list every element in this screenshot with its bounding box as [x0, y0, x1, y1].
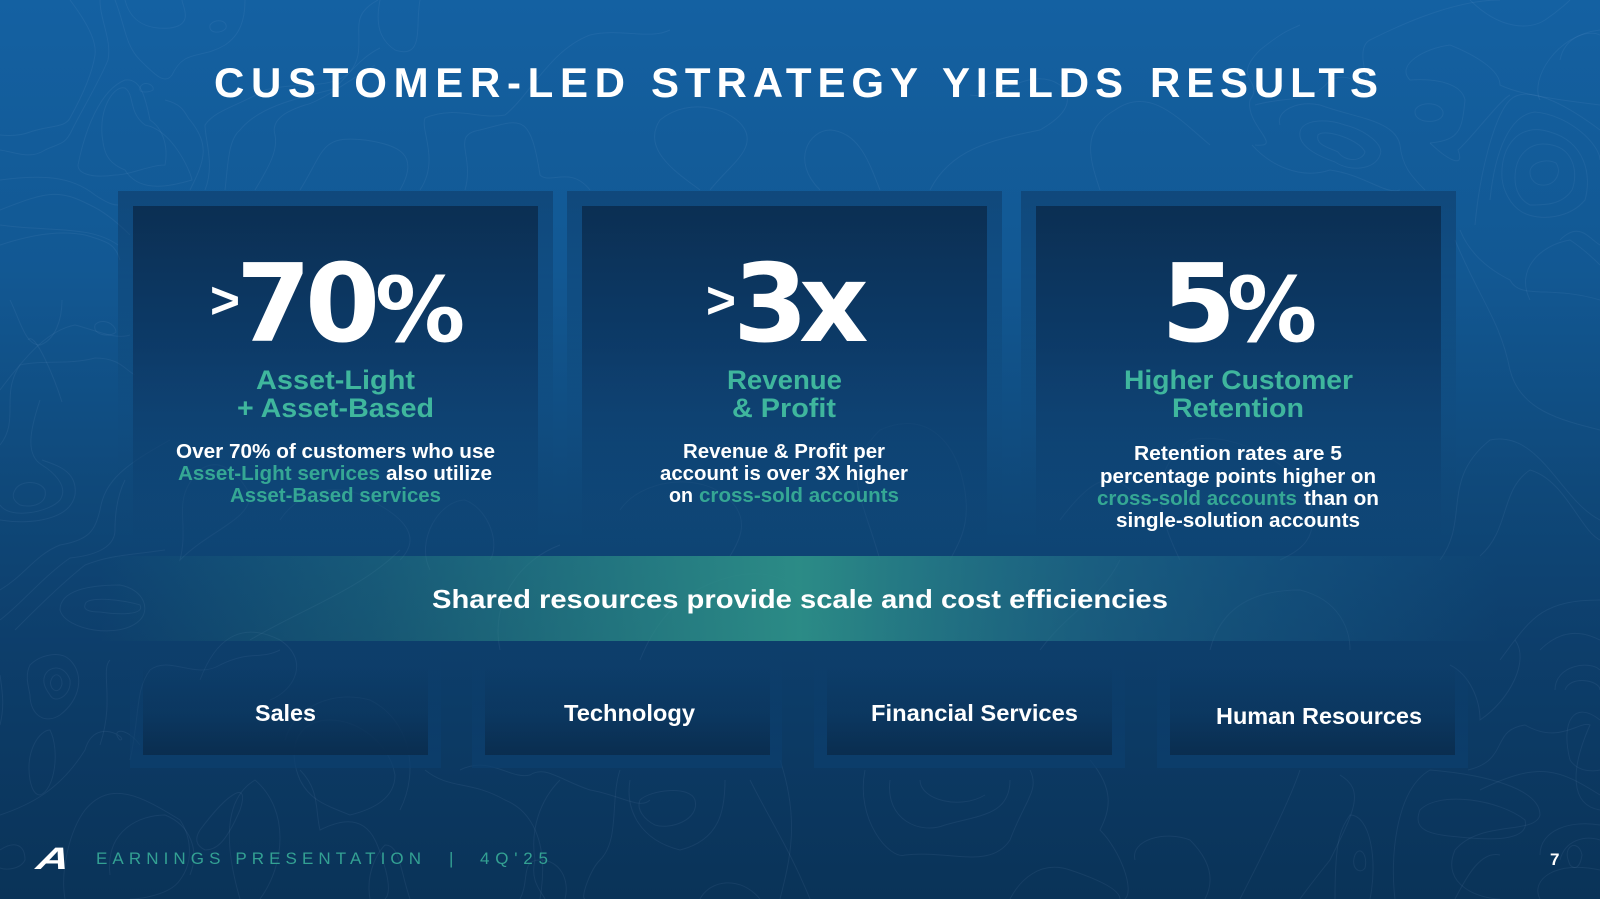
description: Asset-Light services — [178, 463, 380, 485]
box: financial services — [814, 641, 1125, 768]
description: Revenue & Profit per — [683, 441, 885, 463]
heading: Higher Customer — [1124, 365, 1353, 395]
heading: Asset-Light — [256, 365, 415, 395]
panel frame — [1021, 191, 1456, 556]
heading: Revenue — [727, 365, 842, 395]
box: technology: Technology — [564, 700, 695, 726]
banner: shared resources — [100, 556, 1500, 641]
title — [214, 59, 1378, 106]
heading — [1124, 365, 1353, 423]
heading — [727, 365, 842, 423]
banner: shared resources: Shared resources provide scale and cost efficiencies — [432, 584, 1168, 614]
description: cross-sold accounts — [699, 485, 899, 507]
box: financial services: Financial Services — [871, 700, 1078, 726]
description — [660, 441, 908, 507]
big number: 5 percent: % — [1227, 258, 1317, 363]
logo: A — [32, 841, 73, 876]
big number: greater than 70 percent: 70 — [236, 242, 380, 367]
big number: greater than 3x: > — [706, 272, 736, 330]
footer label: | — [449, 849, 453, 868]
title: RESULTS — [1150, 59, 1378, 106]
box: sales: Sales — [255, 700, 316, 726]
description: Retention rates are 5 — [1134, 443, 1342, 465]
description: than on — [1304, 488, 1379, 510]
footer label: 4Q'25 — [480, 849, 548, 868]
box: human resources: Human Resources — [1216, 703, 1422, 729]
big number: greater than 70 percent: % — [375, 258, 465, 363]
big number: greater than 3x: 3x — [733, 242, 869, 367]
big number: greater than 70 percent — [210, 242, 465, 367]
description: single-solution accounts — [1116, 510, 1360, 532]
footer label: EARNINGS PRESENTATION — [96, 849, 421, 868]
title: STRATEGY — [651, 59, 918, 106]
heading: & Profit — [732, 393, 836, 423]
panel frame — [118, 191, 553, 556]
heading: Retention — [1172, 393, 1304, 423]
panel: asset-light plus asset-based — [118, 191, 553, 556]
panel frame — [567, 191, 1002, 556]
description — [1097, 443, 1379, 532]
big number: 5 percent — [1161, 242, 1317, 367]
heading: + Asset-Based — [237, 393, 434, 423]
description: Over 70% of customers who use — [176, 441, 495, 463]
title: CUSTOMER-LED — [214, 59, 625, 106]
description: Asset-Based services — [230, 485, 441, 507]
box: sales — [130, 641, 441, 768]
description: cross-sold accounts — [1097, 488, 1297, 510]
description: percentage points higher on — [1100, 466, 1376, 488]
heading — [237, 365, 434, 423]
description — [176, 441, 495, 507]
page number: 7 — [1550, 850, 1559, 869]
description: also utilize — [386, 463, 492, 485]
description: account is over 3X higher — [660, 463, 908, 485]
panel: revenue and profit — [567, 191, 1002, 556]
box: technology — [472, 641, 782, 768]
big number: 5 percent: 5 — [1161, 242, 1236, 367]
panel: higher customer retention — [1021, 191, 1456, 556]
box: human resources — [1157, 641, 1468, 768]
description: on — [669, 485, 693, 507]
title: YIELDS — [942, 59, 1123, 106]
big number: greater than 70 percent: > — [210, 272, 240, 330]
